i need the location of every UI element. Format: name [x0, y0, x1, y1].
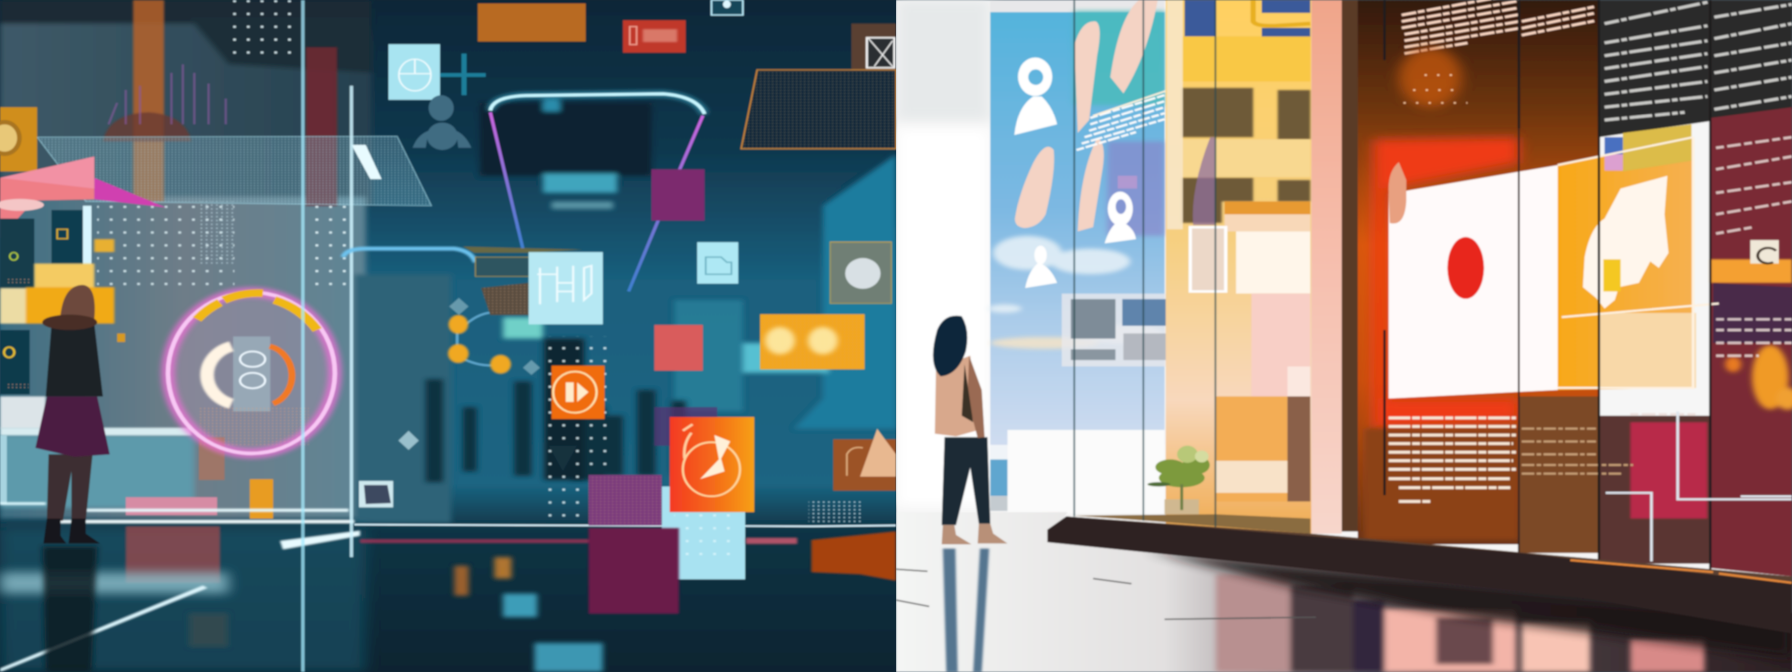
purple reflection [1193, 137, 1215, 225]
dark strap [962, 364, 973, 422]
plinth face [1047, 516, 1792, 633]
top [935, 356, 976, 436]
neon ring dashboard [168, 292, 335, 480]
fur collar [42, 315, 97, 330]
mural diagonal highlight [1093, 45, 1189, 116]
mid windows [1182, 88, 1310, 223]
reflection [943, 549, 989, 672]
background: dark teal concourse [0, 0, 896, 672]
diamond marks [398, 298, 540, 450]
peach blobs [1015, 0, 1158, 231]
user icon medium [1105, 192, 1136, 243]
map silhouette [1583, 176, 1669, 309]
blue top windows [1185, 0, 1310, 40]
cyan neon arch [490, 94, 705, 291]
white crescent [207, 346, 231, 404]
white screen [1389, 165, 1558, 399]
dark dotted tower [543, 336, 611, 521]
cream band [1182, 139, 1310, 177]
boots [43, 519, 100, 543]
glass vertical edges [301, 0, 353, 672]
holographic mesh plane [37, 136, 431, 206]
magenta tile [651, 169, 705, 221]
facade middle [1519, 0, 1599, 553]
yellow molecule [448, 312, 511, 374]
purple dotted tile [589, 475, 662, 525]
shoes [942, 524, 1007, 544]
icon tile: bars [529, 252, 603, 324]
faint purple bar chart [109, 64, 226, 124]
yellow-orange sheet [1558, 137, 1693, 390]
right teal block [480, 99, 896, 429]
small icon badge [1750, 240, 1779, 264]
orange top tile [478, 3, 586, 42]
red crescent at corner [1388, 162, 1406, 223]
magenta backing [654, 407, 717, 446]
glass mullions [1074, 0, 1215, 527]
pink label [1118, 176, 1137, 189]
yellow corner box [0, 107, 37, 171]
lower brown [1365, 429, 1519, 540]
dark blue band right [1713, 283, 1792, 343]
thin floor line [354, 525, 896, 526]
grey circle tile [830, 242, 891, 303]
pink column [1311, 0, 1358, 534]
building body [1166, 0, 1311, 534]
yellow top block [1623, 124, 1691, 171]
dotted white block [809, 501, 863, 523]
background: white lobby [896, 0, 1792, 672]
mural wall [987, 0, 1189, 445]
panel outlines [1558, 137, 1719, 388]
facade frame lines [1385, 0, 1710, 570]
leaves [1147, 446, 1210, 487]
pale lower tile [662, 486, 745, 579]
coat [46, 319, 103, 396]
grey info cards [1062, 294, 1233, 366]
panel: daylight glass storefront [896, 0, 1792, 672]
woman from behind [35, 285, 110, 672]
white reflection panel [1190, 201, 1310, 294]
gold frame [1253, 0, 1310, 26]
left kiosk panels [0, 206, 125, 394]
lower pale block [1599, 313, 1696, 388]
person silhouette icon [413, 95, 471, 150]
yellow band [1182, 36, 1310, 81]
glowing orange tile [760, 314, 865, 369]
lower grey-pink panel [1599, 416, 1710, 564]
crimson reflection [1630, 422, 1707, 519]
stem [1179, 484, 1184, 510]
screen seam [1517, 129, 1520, 553]
small white tile [359, 481, 393, 507]
arm [967, 356, 985, 438]
upper right dark panels [1599, 0, 1792, 137]
legs [47, 454, 93, 521]
mural text lines [1077, 95, 1165, 150]
white bench [990, 430, 1165, 513]
left wall [0, 0, 451, 523]
white screen with red dot [1388, 129, 1558, 553]
lower cream [1216, 461, 1287, 493]
orange vertical band [103, 0, 191, 201]
orange panel behind map [1558, 124, 1719, 390]
blurred floor reflection band [0, 572, 229, 594]
planter shadow [1165, 499, 1199, 514]
brown tile with beige triangle [833, 429, 896, 491]
reflection [43, 546, 97, 672]
red glow [1373, 137, 1519, 429]
teal cross [440, 54, 486, 95]
orange floor box [250, 479, 273, 519]
dark red column [306, 47, 337, 206]
glass base shade [1074, 514, 1310, 534]
ring inner panel [168, 292, 335, 480]
orange blurred reflections [189, 557, 603, 672]
warm bokeh [1725, 345, 1792, 410]
yellow glowing block [0, 264, 114, 324]
floor shadow [1147, 551, 1792, 658]
dot field [97, 0, 349, 291]
right panel text [1630, 137, 1792, 414]
lower middle text [1522, 429, 1633, 474]
right red panel [1710, 107, 1792, 576]
right floor reflection [746, 531, 896, 581]
reflected yellow building [1166, 0, 1311, 534]
orange edge highlight [1570, 560, 1792, 583]
icon tile: folder [697, 242, 738, 284]
pink reflection panel [1251, 294, 1310, 396]
panel: neon holographic scene [0, 0, 896, 672]
top right icon box [851, 24, 896, 92]
big orange red icon tile [670, 417, 754, 512]
ring stroke [168, 292, 335, 453]
plinth base [1047, 516, 1792, 633]
pink roof shape [0, 156, 166, 220]
orange play icon tile [551, 366, 605, 419]
blue neon arc [343, 249, 475, 262]
pink floor reflections [1216, 574, 1705, 672]
lower amber [1216, 396, 1310, 501]
clouds [987, 236, 1165, 349]
top teal fade [990, 0, 1165, 236]
magenta floor reflection [589, 528, 679, 614]
icon tile: mouse [389, 44, 440, 100]
upper dark panel text [1605, 2, 1792, 120]
diagonal floor light [0, 585, 207, 672]
floor dashes [896, 569, 1316, 619]
skirt [35, 396, 110, 457]
lower middle glass [1519, 396, 1599, 553]
hair [60, 285, 95, 319]
orange glass facade [1358, 0, 1792, 576]
bright floor lines [0, 502, 360, 549]
plinth top [1066, 516, 1792, 585]
legs [942, 437, 990, 525]
salmon tile [654, 325, 703, 371]
striped grey block [1175, 366, 1215, 459]
hair [933, 316, 967, 376]
blue and lilac swatches [1605, 137, 1623, 171]
orange arc [270, 346, 292, 404]
potted plant [1147, 446, 1210, 514]
standing woman [933, 316, 1007, 672]
blurred crowd [426, 379, 686, 482]
orange band right [1710, 259, 1792, 283]
ring gold arcs [197, 293, 317, 330]
user icon small [1025, 246, 1057, 288]
red floor stripe [360, 539, 663, 543]
facade fill [1358, 0, 1519, 544]
mural background [990, 12, 1165, 445]
mesh fragment near tile [463, 246, 583, 315]
top wall tint [896, 0, 990, 506]
pale left edge [1167, 0, 1183, 229]
white corner pipes [1606, 411, 1792, 561]
user icon large [1014, 57, 1057, 135]
white counter strip [0, 396, 191, 504]
map yellow accent [1603, 259, 1621, 291]
floor [896, 512, 1792, 672]
lower screen text [1389, 418, 1516, 501]
ring glow [168, 292, 335, 453]
red dot [1447, 237, 1484, 299]
centre ovals [240, 351, 265, 388]
red tile [623, 20, 686, 53]
pink floor panel [126, 497, 220, 583]
small user icon top [711, 0, 743, 15]
mesh panel orange outline [741, 70, 896, 149]
orange spark cluster [1399, 47, 1467, 107]
left floor teal wash [0, 527, 366, 672]
top text block [1402, 0, 1596, 54]
